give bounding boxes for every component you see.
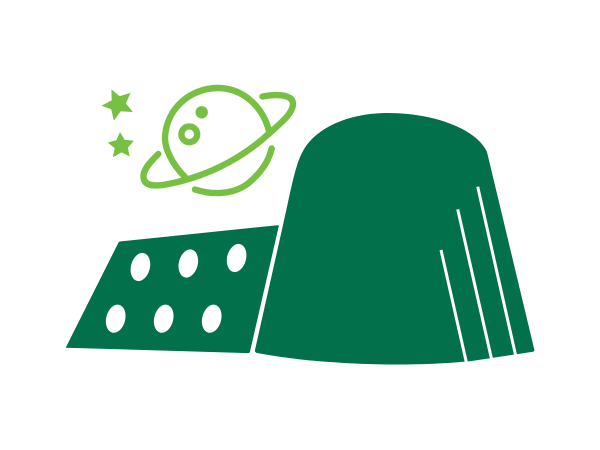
planet ring front [143,95,293,185]
panel: left building with windows [66,225,279,353]
icon: large star [102,90,132,120]
planet body [165,88,269,177]
panel: domed building [255,113,534,365]
planet crater ring [181,126,197,142]
icon: ringed planet [143,88,293,193]
icon: small star [108,133,133,157]
planet ring lower arc [195,148,272,193]
planet crater dot [196,106,208,119]
